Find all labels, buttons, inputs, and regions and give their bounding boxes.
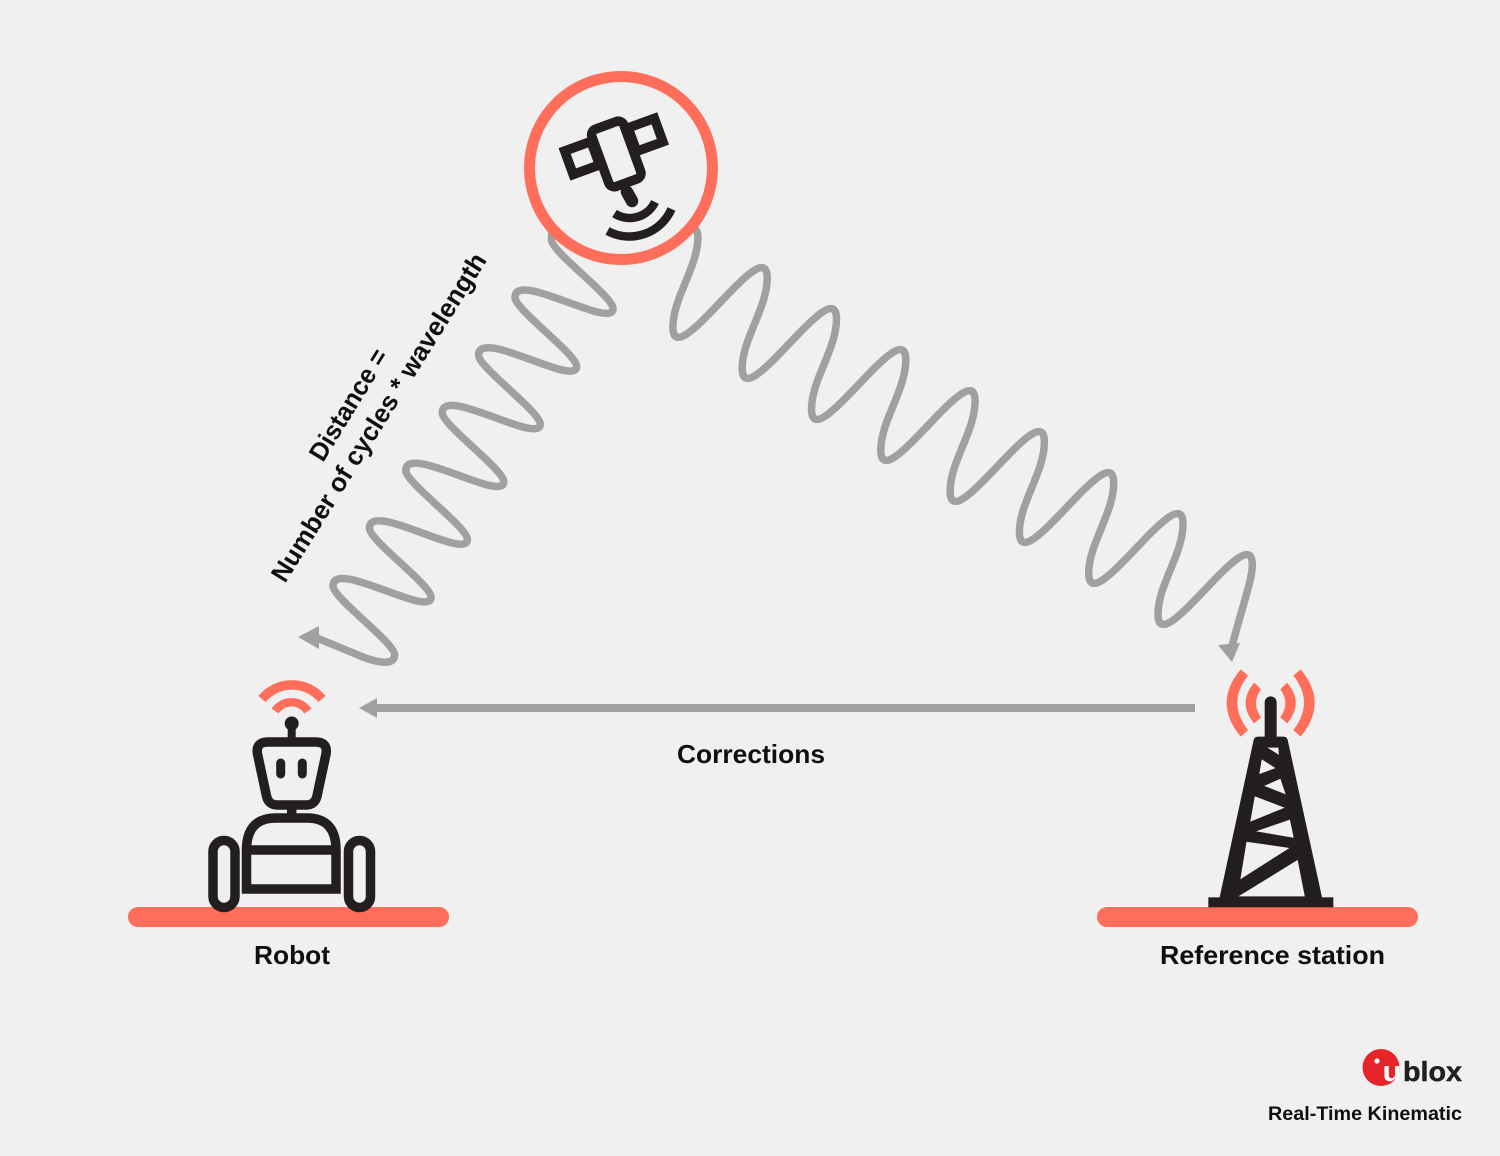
label: distance formula: Number of cycles * wavelength bbox=[265, 247, 493, 587]
icon: robot wifi signal bbox=[262, 685, 322, 711]
caption: real-time kinematic: Real-Time Kinematic bbox=[1268, 1103, 1462, 1125]
ground bar: robot bbox=[128, 907, 449, 927]
arrow: corrections bbox=[359, 698, 1195, 718]
ground bar: reference station bbox=[1097, 907, 1418, 927]
icon: satellite bbox=[561, 109, 672, 237]
satellite badge bbox=[530, 76, 712, 260]
label: distance formula: Distance = bbox=[303, 343, 394, 466]
wave: satellite to reference station bbox=[673, 227, 1252, 662]
label: reference station: Reference station bbox=[1160, 940, 1385, 970]
icon: robot bbox=[213, 685, 370, 908]
label: robot: Robot bbox=[254, 940, 330, 970]
wave: satellite to robot bbox=[298, 228, 613, 662]
label: corrections: Corrections bbox=[677, 739, 825, 769]
logo: u-blox bbox=[1362, 1049, 1462, 1088]
logo: u-blox: u bbox=[1382, 1056, 1402, 1088]
icon: tower signal waves bbox=[1227, 669, 1315, 737]
logo: u-blox: blox bbox=[1403, 1056, 1462, 1087]
icon: reference station tower bbox=[1208, 669, 1333, 907]
